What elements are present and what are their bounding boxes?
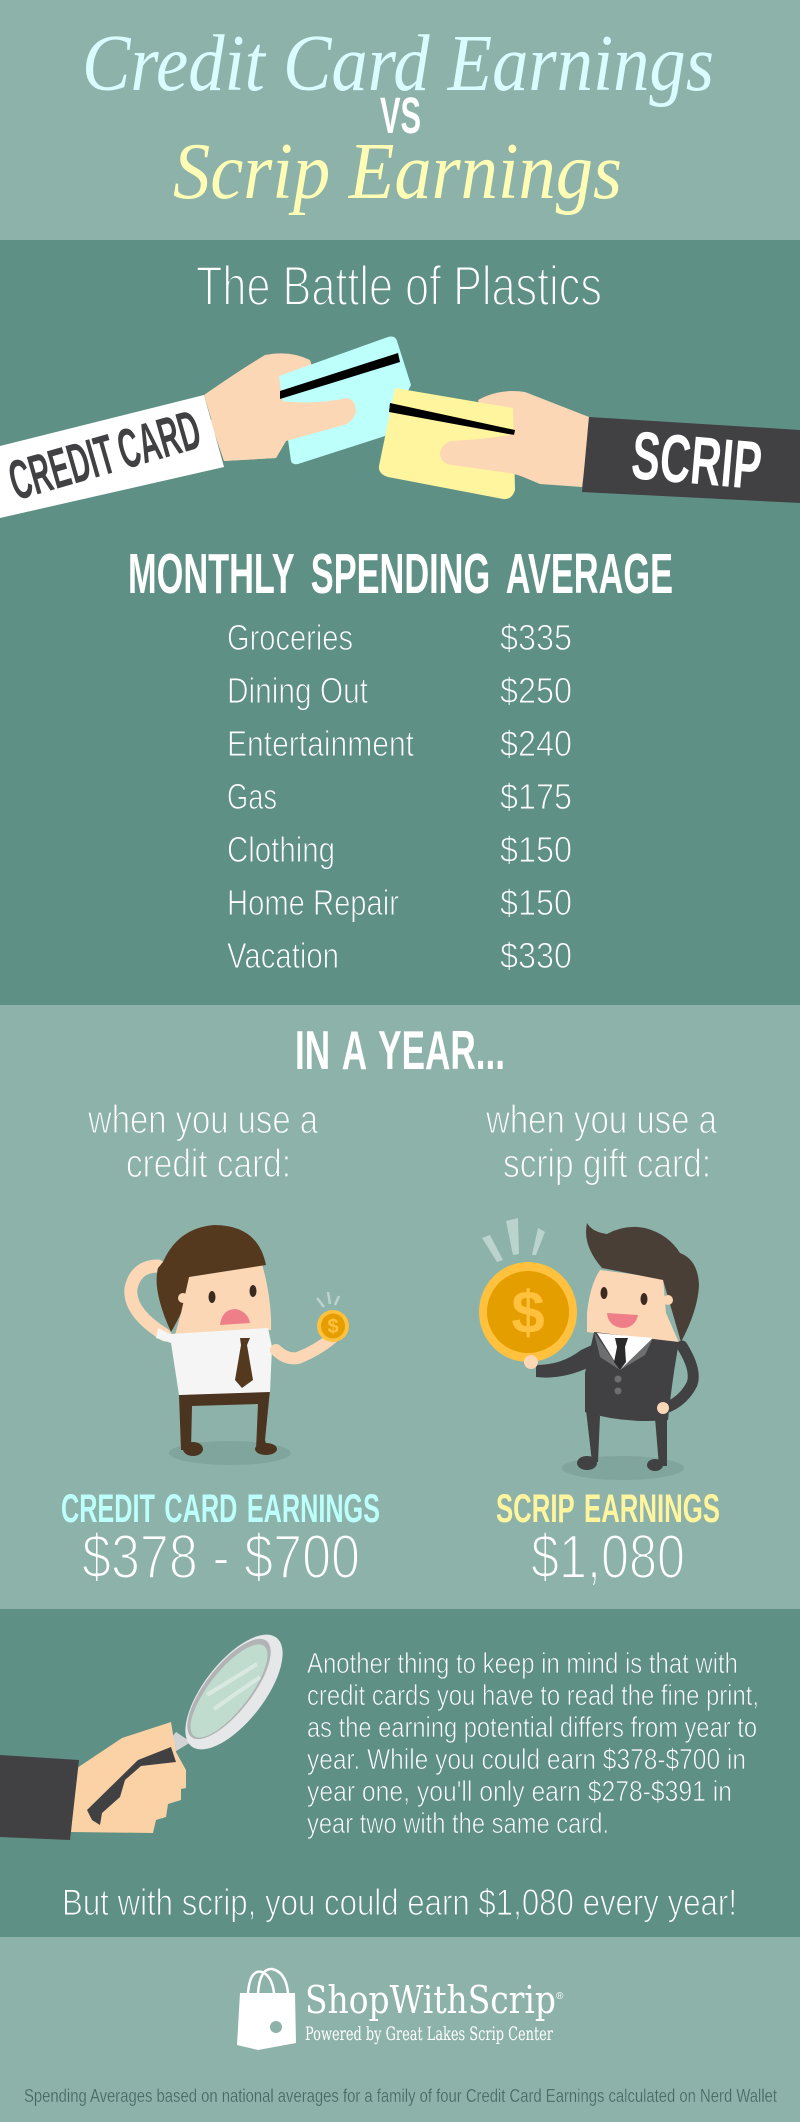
row: vacation: Vacation [227, 935, 339, 976]
illustration: worried man with small coin: $ [327, 1316, 339, 1338]
row: dining out: Dining Out [227, 670, 368, 711]
scrip earnings figure: $1,080 [531, 1523, 685, 1592]
row: entertainment [227, 723, 572, 764]
scrip hand [379, 388, 800, 504]
row: gas [227, 776, 572, 817]
row: dining out [227, 670, 572, 711]
paragraph: fine print: year two with the same card. [307, 1808, 609, 1840]
row: vacation: $330 [500, 935, 572, 976]
row: groceries: Groceries [227, 617, 353, 658]
heading: in a year: IN A YEAR... [295, 1019, 505, 1081]
row: home repair: $150 [500, 882, 572, 923]
heading: the battle of plastics: The Battle of Plastics [196, 254, 602, 317]
row: entertainment: Entertainment [227, 723, 414, 764]
row: groceries: $335 [500, 617, 572, 658]
row: vacation [227, 935, 572, 976]
row: gas: $175 [500, 776, 572, 817]
scrip earnings figure [496, 1487, 720, 1592]
illustration: worried man with small coin [131, 1225, 349, 1465]
row: home repair [227, 882, 572, 923]
icon: shopping bag [237, 1969, 296, 2050]
logo: shopwithscrip [237, 1969, 564, 2050]
row: home repair: Home Repair [227, 882, 399, 923]
credit card earnings figure: $378 - $700 [82, 1523, 360, 1592]
logo: shopwithscrip: ShopWithScrip [305, 1978, 556, 2022]
subheading: credit card: when you use a [87, 1098, 319, 1142]
paragraph: fine print: year one, you'll only earn $278-$391 in [307, 1776, 732, 1808]
illustration: hand with magnifying glass [0, 1619, 300, 1840]
credit card earnings figure [61, 1487, 380, 1592]
subheading: credit card: credit card: [126, 1142, 291, 1186]
row: clothing: Clothing [227, 829, 335, 870]
row: gas: Gas [227, 776, 277, 817]
illustration: happy businessman with big coin: $ [511, 1279, 545, 1346]
row: entertainment: $240 [500, 723, 572, 764]
row: clothing [227, 829, 572, 870]
title: Scrip Earnings [173, 128, 622, 216]
logo: shopwithscrip: ® [556, 1991, 564, 2002]
row: groceries [227, 617, 572, 658]
title: Credit Card Earnings [82, 20, 714, 108]
title: VS [380, 87, 421, 144]
illustration: happy businessman with big coin [479, 1218, 699, 1480]
subheading: scrip gift card [485, 1098, 718, 1186]
credit card earnings figure: CREDIT CARD EARNINGS [61, 1487, 380, 1531]
spending table [227, 617, 572, 976]
credit card hand: CREDIT CARD [2, 397, 207, 512]
subheading: scrip gift card: when you use a [485, 1098, 718, 1142]
subheading: credit card [87, 1098, 319, 1186]
logo: shopwithscrip: Powered by Great Lakes Scrip Center [305, 2023, 554, 2045]
subheading: scrip gift card: scrip gift card: [503, 1142, 711, 1186]
row: clothing: $150 [500, 829, 572, 870]
illustration: hands exchanging cards [0, 336, 800, 518]
row: dining out: $250 [500, 670, 572, 711]
title [82, 20, 714, 216]
paragraph: fine print [307, 1648, 759, 1840]
